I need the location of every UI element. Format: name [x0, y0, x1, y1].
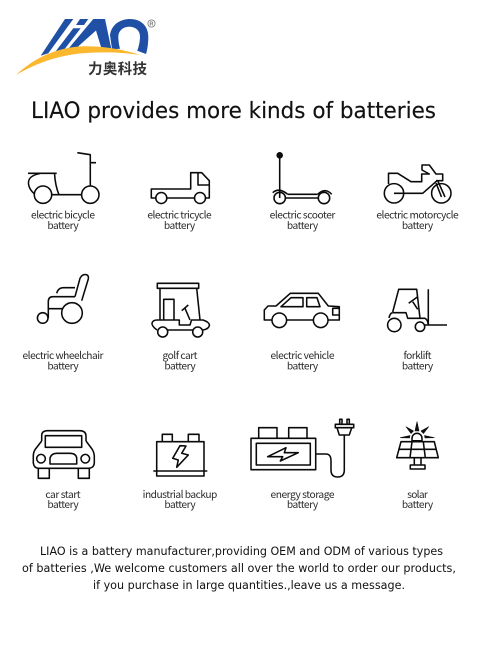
panel: electric bicycle battery [28, 153, 99, 232]
logo yellow swoosh [16, 46, 140, 75]
label: electric tricycle [147, 206, 212, 222]
label: electric bicycle [31, 206, 95, 222]
panel: electric tricycle battery [147, 173, 212, 232]
label: battery [287, 496, 319, 511]
label: electric vehicle [270, 347, 335, 362]
panel: car start battery [33, 431, 94, 511]
logo letters LIAO [41, 19, 148, 56]
line 3: if you purchase in large quantities.,leave us a message. [93, 578, 405, 592]
label: battery [402, 217, 434, 232]
panel: golf cart battery [152, 283, 210, 372]
line 2: of batteries ,We welcome customers all over the world to order our products, [22, 561, 456, 575]
title: LIAO provides more kinds of batteries [31, 98, 436, 124]
panel: electric scooter battery [270, 153, 335, 232]
label: solar [407, 486, 428, 501]
label: forklift [404, 347, 432, 362]
panel: forklift battery [388, 289, 447, 372]
icon: golf cart [152, 283, 210, 337]
icon: backup battery [153, 434, 207, 476]
icon: electric bicycle [28, 153, 99, 203]
icon: solar panel [397, 422, 438, 469]
label: battery [47, 358, 79, 372]
icon: electric vehicle [264, 293, 339, 328]
label: battery [164, 358, 196, 372]
label: golf cart [162, 347, 198, 362]
panel: electric vehicle battery [264, 293, 339, 372]
icon: forklift [388, 289, 447, 332]
icon: electric motorcycle [384, 165, 451, 203]
panel: industrial backup battery [143, 434, 217, 511]
logo [16, 19, 155, 79]
icon: car front [33, 431, 94, 478]
label: electric motorcycle [376, 206, 459, 222]
logo registered mark: R [150, 22, 154, 28]
label: battery [402, 358, 434, 372]
label: car start [45, 486, 81, 501]
label: battery [47, 496, 79, 511]
panel: electric motorcycle battery [376, 165, 459, 232]
label: battery [402, 496, 434, 511]
label: battery [287, 358, 319, 372]
icon: electric tricycle [151, 173, 209, 204]
icon: electric wheelchair [37, 274, 88, 323]
panel: electric wheelchair battery [22, 274, 104, 372]
label: battery [47, 217, 79, 232]
label: battery [164, 496, 196, 511]
label: electric scooter [270, 206, 335, 222]
description text [22, 544, 456, 592]
panel: solar battery [397, 422, 438, 511]
label: energy storage [270, 486, 335, 501]
line 1: LIAO is a battery manufacturer,providing OEM and ODM of various types [40, 544, 443, 558]
label: battery [164, 217, 196, 232]
icon: electric scooter [273, 153, 332, 204]
logo Chinese name: 力奥科技 [88, 58, 148, 79]
label: battery [287, 217, 319, 232]
panel: energy storage battery [251, 419, 354, 511]
label: electric wheelchair [22, 347, 104, 362]
icon: energy storage with plug [251, 419, 354, 477]
label: industrial backup [143, 486, 217, 501]
